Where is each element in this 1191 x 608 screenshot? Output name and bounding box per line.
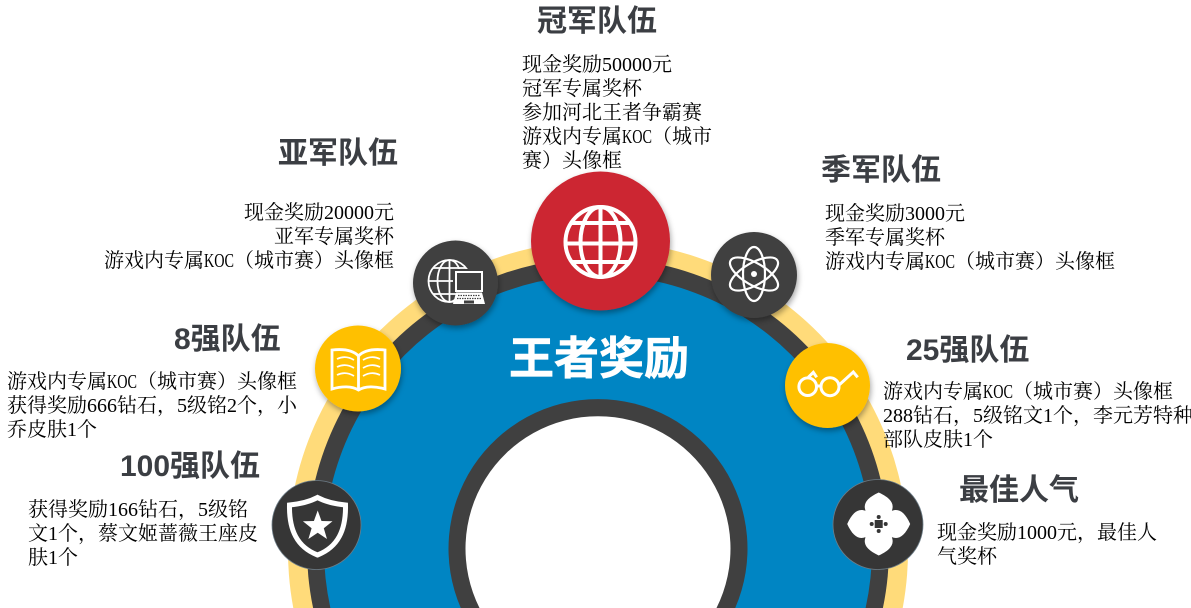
heading: top 8: 8强队伍 — [174, 323, 281, 356]
central ring diagram — [288, 241, 908, 608]
icon: top 8 book — [315, 326, 401, 412]
panel: most popular — [937, 474, 1157, 568]
text: most popular rewards: 现金奖励1000元，最佳人 — [937, 521, 1157, 544]
heading: most popular: 最佳人气 — [959, 474, 1079, 507]
text: top 25 rewards — [883, 380, 1191, 451]
heading: top 25: 25强队伍 — [906, 334, 1029, 367]
text: third place rewards — [825, 202, 1115, 273]
panel: champion team — [522, 5, 712, 172]
central title: 王者奖励 — [509, 333, 689, 384]
text: third place rewards: 游戏内专属KOC（城市赛）头像框 — [825, 250, 1115, 273]
text: champion rewards: 现金奖励50000元 — [522, 53, 672, 76]
text: top 25 rewards: 游戏内专属KOC（城市赛）头像框 — [883, 380, 1173, 403]
text: top 100 rewards: 文1个，蔡文姬蔷薇王座皮 — [28, 522, 258, 545]
text: third place rewards: 季军专属奖杯 — [825, 226, 946, 249]
heading: top 100: 100强队伍 — [120, 450, 260, 483]
text: top 25 rewards: 部队皮肤1个 — [883, 428, 993, 451]
text: top 8 rewards: 乔皮肤1个 — [7, 418, 97, 441]
panel: top 8 team — [7, 323, 298, 441]
text: runner-up rewards: 游戏内专属KOC（城市赛）头像框 — [104, 249, 394, 272]
text: top 8 rewards: 游戏内专属KOC（城市赛）头像框 — [7, 370, 297, 393]
text: top 25 rewards: 288钻石，5级铭文1个，李元芳特种 — [883, 404, 1191, 427]
text: runner-up rewards: 现金奖励20000元 — [244, 201, 394, 224]
icon: runner-up globe and laptop — [413, 240, 498, 326]
heading: runner-up: 亚军队伍 — [278, 137, 398, 170]
panel: top 25 team — [883, 334, 1191, 451]
text: champion rewards — [522, 53, 712, 172]
text: most popular rewards — [937, 521, 1157, 568]
text: top 8 rewards — [7, 370, 298, 441]
text: top 100 rewards: 肤1个 — [28, 546, 78, 569]
panel: third place team — [821, 154, 1115, 273]
text: runner-up rewards — [104, 201, 395, 272]
text: champion rewards: 参加河北王者争霸赛 — [522, 101, 702, 124]
text: runner-up rewards: 亚军专属奖杯 — [274, 225, 395, 248]
panel: top 100 team — [28, 450, 260, 569]
text: top 100 rewards: 获得奖励166钻石，5级铭 — [28, 498, 248, 521]
text: top 8 rewards: 获得奖励666钻石，5级铭2个，小 — [7, 394, 298, 417]
panel: runner-up team — [104, 137, 398, 272]
text: third place rewards: 现金奖励3000元 — [825, 202, 965, 225]
text: most popular rewards: 气奖杯 — [937, 545, 998, 568]
text: champion rewards: 赛）头像框 — [522, 149, 622, 172]
heading: third place: 季军队伍 — [821, 154, 941, 187]
icon: champion globe — [531, 172, 670, 310]
text: top 100 rewards — [28, 498, 258, 569]
icon: most popular flower — [833, 480, 923, 570]
text: champion rewards: 游戏内专属KOC（城市 — [522, 125, 712, 148]
icon: top 25 glasses — [785, 343, 870, 428]
heading: champion: 冠军队伍 — [537, 5, 657, 38]
icon: third place atom — [711, 232, 797, 318]
icon: top 100 shield — [272, 480, 361, 570]
text: champion rewards: 冠军专属奖杯 — [522, 77, 643, 100]
